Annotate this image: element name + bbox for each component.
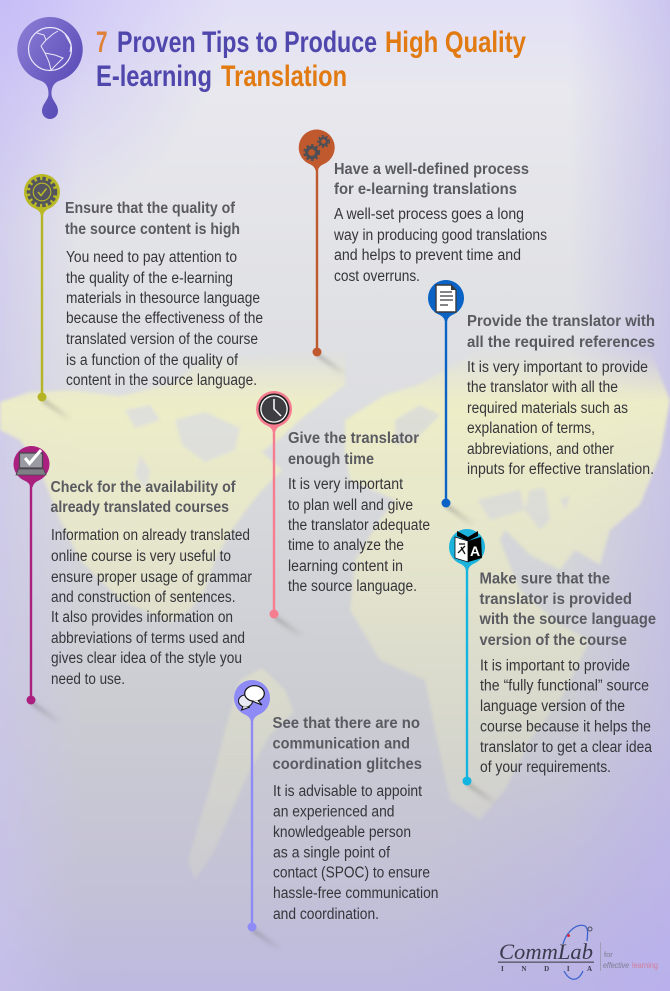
tip 5 body: It also provides information on [51, 609, 233, 626]
tip 4 heading: enough time [288, 451, 374, 468]
tip 6 heading: version of the course [480, 632, 627, 649]
tip 1 heading: the source content is high [65, 221, 240, 238]
tip 7 heading [272, 715, 422, 773]
icon: document [428, 280, 464, 321]
tip 4 body [288, 476, 430, 595]
tip 3 heading: Provide the translator with [467, 313, 655, 330]
icon: speech bubbles [234, 680, 270, 721]
panel: tip 2 defined process [299, 130, 547, 375]
heading line 1: 7 [96, 26, 108, 59]
tip 7 body: hassle-free communication [273, 885, 438, 902]
heading line 2: E-learning [96, 60, 212, 93]
tip 5 heading [50, 479, 236, 516]
tip 1 heading: Ensure that the quality of [65, 200, 236, 217]
tip 7 body: contact (SPOC) to ensure [273, 864, 430, 882]
logo: CommLab India: for [604, 950, 613, 959]
tip 6 heading: translator is provided [480, 591, 632, 608]
icon: translation book: A [470, 543, 480, 559]
title block [17, 17, 526, 119]
tip 7 body [273, 783, 438, 923]
tip 7 heading: coordination glitches [272, 756, 422, 773]
icon: translation book [449, 529, 485, 570]
stem and dot [38, 205, 72, 420]
tip 6 body: of your requirements. [480, 759, 611, 776]
tip 5 body: ensure proper usage of grammar [51, 569, 252, 586]
tip 3 body: It is very important to provide [467, 359, 648, 376]
panel: tip 5 already translated courses [13, 446, 252, 723]
icon: quality badge gear [24, 174, 60, 215]
panel: tip 3 required references [428, 280, 655, 526]
logo: CommLab India [498, 925, 658, 979]
tip 6 body: translator to get a clear idea [480, 739, 652, 756]
tip 1 body: materials in thesource language [66, 290, 260, 307]
tip 6 heading [479, 570, 656, 649]
heading line 2: Translation [221, 60, 347, 93]
tip 1 body: the quality of the e-learning [66, 270, 233, 287]
tip 4 body: to plan well and give [288, 497, 413, 514]
stem and dot [312, 160, 347, 375]
logo: CommLab India: I N D I A [501, 965, 592, 973]
tip 5 body: Information on already translated [51, 527, 250, 544]
tip 2 body: and helps to prevent time and [334, 247, 521, 264]
tip 3 body: required materials such as [467, 400, 628, 417]
tip 3 body [467, 359, 654, 478]
tip 5 body: online course is very useful to [51, 548, 231, 565]
tip 1 heading [65, 200, 240, 238]
heading line 1: Proven Tips to Produce [117, 26, 377, 59]
stem and dot [248, 712, 282, 950]
logo: CommLab India: CommLab [499, 939, 593, 964]
logo: CommLab India: learning [632, 960, 658, 970]
heading line 1: High Quality [385, 26, 526, 59]
tip 7 heading: See that there are no [272, 715, 420, 732]
tip 3 heading [467, 313, 655, 351]
world map background [0, 350, 670, 880]
tip 1 body: You need to pay attention to [66, 249, 237, 266]
tip 4 heading: Give the translator [288, 430, 419, 447]
logo: CommLab India: effective [603, 960, 629, 970]
tip 5 body [51, 527, 252, 688]
tip 6 body [480, 658, 652, 776]
tip 2 body: cost overruns. [334, 268, 420, 285]
panel: tip 1 source content quality [24, 174, 263, 420]
tip 4 body: learning content in [288, 558, 403, 575]
tip 5 body: gives clear idea of the style you [51, 650, 242, 667]
tip 5 body: need to use. [51, 671, 125, 688]
tip 6 body: course because it helps the [480, 718, 651, 736]
tip 6 heading: Make sure that the [480, 570, 610, 588]
stem and dot [26, 480, 61, 723]
tip 1 body [66, 249, 263, 389]
tip 1 body: content in the source language. [66, 372, 257, 389]
stem and dot [462, 560, 497, 804]
tip 2 body: A well-set process goes a long [334, 206, 524, 223]
tip 3 body: the translator with all the [467, 379, 618, 396]
tip 5 body: abbreviations of terms used and [51, 630, 245, 647]
panel: tip 6 source language version [449, 529, 656, 804]
tip 2 heading: for e-learning translations [334, 181, 517, 198]
tip 2 heading [334, 161, 529, 198]
tip 6 body: It is important to provide [480, 658, 630, 674]
tip 3 body: abbreviations, and other [467, 441, 614, 458]
panel: tip 4 enough time [256, 391, 430, 637]
tip 7 body: and coordination. [273, 906, 379, 923]
stem and dot [270, 424, 304, 637]
tip 4 body: It is very important [288, 476, 404, 493]
stem and dot [442, 312, 476, 526]
tip 4 body: the source language. [288, 578, 417, 595]
tip 7 body: knowledgeable person [273, 824, 411, 841]
tip 5 heading: Check for the availability of [50, 479, 236, 496]
tip 3 body: inputs for effective translation. [467, 461, 654, 478]
tip 7 body: as a single point of [273, 844, 391, 862]
tip 5 heading: already translated courses [50, 499, 229, 516]
tip 4 body: the translator adequate [288, 517, 430, 534]
tip 5 body: and construction of sentences. [51, 589, 236, 606]
tip 1 body: because the effectiveness of the [66, 310, 263, 327]
tip 4 heading [288, 430, 419, 468]
tip 7 heading: communication and [272, 736, 410, 752]
icon: gears [299, 130, 335, 170]
tip 1 body: is a function of the quality of [66, 352, 239, 369]
tip 6 heading: with the source language [479, 611, 656, 628]
tip 2 heading: Have a well-defined process [334, 161, 529, 178]
tip 2 body: way in producing good translations [333, 227, 547, 244]
tip 4 body: time to analyze the [288, 537, 404, 554]
tip 1 body: translated version of the course [66, 331, 258, 348]
tip 6 body: the “fully functional” source [480, 678, 649, 694]
tip 7 body: an experienced and [273, 804, 394, 820]
tip 6 body: language version of the [480, 698, 625, 715]
tip 3 heading: all the required references [467, 334, 655, 351]
tip 3 body: explanation of terms, [467, 420, 595, 437]
tip 7 body: It is advisable to appoint [273, 783, 423, 800]
icon: globe drop [17, 17, 83, 119]
panel: tip 7 communication and coordination [234, 680, 438, 950]
icon: clock [256, 391, 292, 432]
tip 2 body [333, 206, 547, 285]
icon: laptop check [13, 446, 49, 487]
